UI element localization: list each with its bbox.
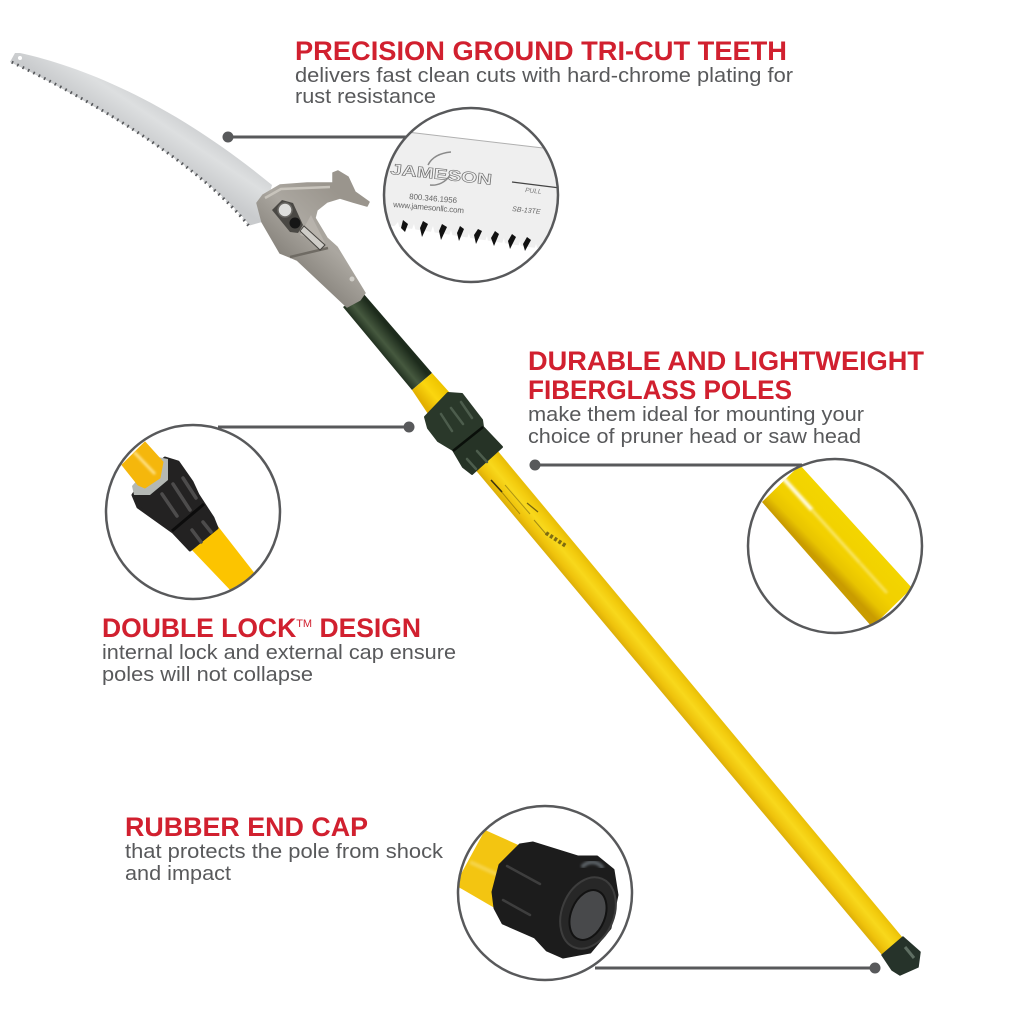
body text: choice of pruner head or saw head [528, 425, 861, 448]
body text [102, 641, 456, 686]
callout: fiberglass poles [528, 346, 924, 633]
double lock collar [425, 393, 502, 474]
bolt plate [272, 200, 303, 233]
yellow upper pole [412, 373, 450, 414]
leader line [595, 962, 880, 974]
dark green upper pole [343, 293, 432, 390]
zoom circle: collar [106, 425, 280, 599]
heading: DOUBLE LOCK [102, 613, 296, 643]
body text: delivers fast clean cuts with hard-chrome plating for [295, 64, 793, 87]
callout: tri-cut teeth [222, 36, 793, 290]
heading: DURABLE AND LIGHTWEIGHT [528, 346, 924, 376]
slider bar [300, 226, 325, 250]
body text [125, 840, 444, 885]
zoom circle: blade detail [382, 106, 560, 284]
zoom circle: yellow pole [748, 459, 922, 633]
zoom circle: blade detail: www.jamesonllc.com [392, 200, 465, 215]
pruner head [257, 171, 369, 307]
zoom circle: end cap [455, 806, 632, 980]
leader line [530, 460, 802, 470]
callout: rubber end cap [125, 806, 880, 980]
zoom circle: blade detail: JAMESON [390, 161, 493, 189]
body text: poles will not collapse [102, 663, 313, 686]
callout: double lock [102, 422, 456, 686]
heading: RUBBER END CAP [125, 812, 368, 842]
yellow main pole [468, 444, 903, 955]
body text: rust resistance [295, 85, 436, 108]
heading [528, 346, 924, 405]
heading: DESIGN [312, 613, 421, 643]
body text [528, 403, 864, 448]
zoom circle: blade detail: PULL [525, 187, 542, 196]
zoom circle: blade detail: SB-13TE [512, 206, 541, 216]
chrome bolt [278, 203, 292, 217]
rubber end cap on pole [882, 937, 920, 975]
leader line [222, 132, 407, 142]
heading: PRECISION GROUND TRI-CUT TEETH [295, 36, 787, 66]
body text: make them ideal for mounting your [528, 403, 864, 426]
leader line [218, 422, 414, 432]
black bolt [290, 218, 300, 228]
saw blade [9, 53, 272, 228]
body text: internal lock and external cap ensure [102, 641, 456, 664]
body text [295, 64, 793, 108]
zoom circle: blade detail: 800.346.1956 [409, 192, 458, 205]
heading: TM [296, 618, 312, 630]
pole label print [491, 480, 566, 546]
heading: FIBERGLASS POLES [528, 375, 792, 405]
body text: and impact [125, 862, 231, 885]
body text: that protects the pole from shock [125, 840, 444, 863]
